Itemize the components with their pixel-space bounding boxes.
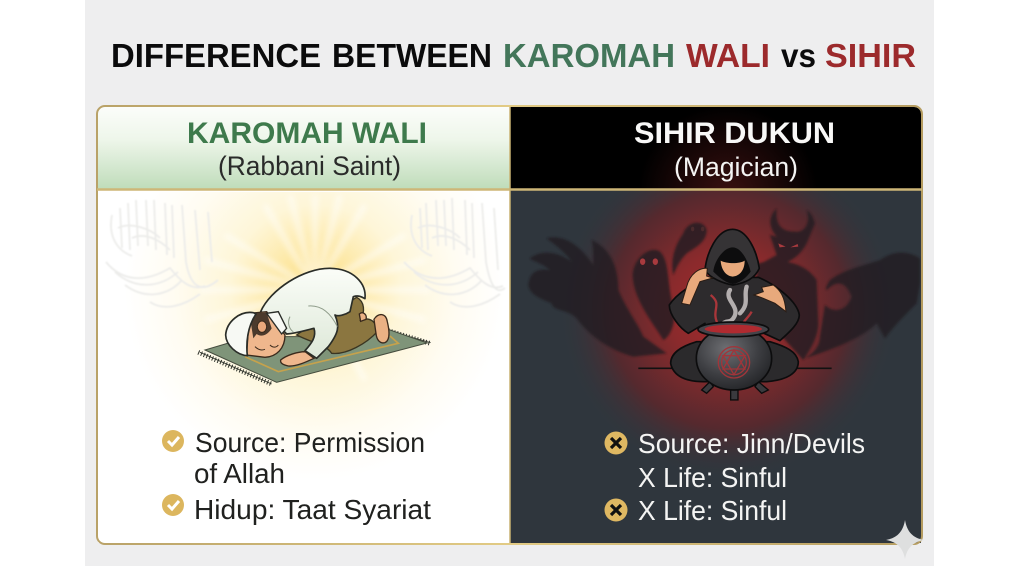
header: karomah wali: KAROMAH WALI [187, 117, 427, 150]
header: sihir dukun: SIHIR DUKUN [634, 117, 835, 150]
calligraphy watermark left [106, 200, 218, 307]
rune circle [718, 347, 750, 378]
trousers and feet [297, 297, 389, 353]
demon [758, 208, 815, 267]
cauldron feet [702, 382, 768, 400]
sihir bullet list: X Life: Sinful [638, 495, 787, 526]
shadow spirits [528, 208, 920, 360]
panel: karomah wali [98, 190, 510, 543]
face [721, 261, 745, 277]
right shadow hand [805, 253, 920, 358]
sihir bullet list: Source: Jinn/Devils [638, 428, 865, 459]
left shadow hand [528, 237, 667, 357]
title: vs [781, 37, 816, 74]
ground line [638, 366, 832, 371]
panel: sihir dukun [510, 190, 921, 543]
header: karomah wali: (Rabbani Saint) [218, 151, 401, 181]
icon: sparkle watermark [886, 520, 924, 559]
crossed legs [671, 342, 798, 382]
title: DIFFERENCE [111, 37, 321, 74]
title: BETWEEN [332, 37, 492, 74]
check icon 2 [162, 494, 184, 516]
shadow eyes [640, 227, 798, 265]
header: sihir dukun: (Magician) [674, 152, 798, 182]
karomah bullet list [162, 427, 431, 525]
title: WALI [686, 37, 770, 74]
head with prayer cap [226, 312, 287, 357]
sihir bullet list: X Life: Sinful [638, 462, 787, 493]
illustration: hooded magician with cauldron [638, 229, 832, 400]
karomah bullet list: of Allah [194, 458, 285, 489]
cauldron body [696, 327, 772, 390]
robe red swirls [711, 295, 752, 327]
light glow [120, 192, 510, 492]
title [111, 37, 916, 74]
calligraphy watermark right [404, 198, 505, 307]
small ghost [672, 223, 707, 275]
robe [669, 277, 799, 341]
x icon 1 [604, 432, 628, 454]
left panel background [98, 190, 510, 543]
arms and hands [682, 268, 786, 312]
check icon 1 [162, 430, 184, 452]
cauldron rim [698, 322, 769, 337]
title: SIHIR [825, 37, 916, 74]
karomah bullet list: Hidup: Taat Syariat [194, 494, 431, 525]
right panel background [510, 190, 921, 543]
prayer rug [198, 329, 431, 384]
hood [705, 229, 759, 285]
smoke [723, 287, 747, 323]
x icon 2 [604, 498, 628, 522]
header: karomah wali [98, 107, 510, 189]
left ghost [633, 250, 674, 340]
white robe [261, 268, 365, 358]
sihir bullet list [604, 428, 865, 526]
illustration: man in prostration on prayer rug [198, 268, 431, 384]
hand [281, 352, 314, 366]
karomah bullet list: Source: Permission [195, 427, 425, 458]
header: sihir dukun [510, 107, 921, 189]
red brew [705, 325, 762, 333]
robe folds [289, 306, 337, 332]
card gold frame [97, 106, 922, 544]
title: KAROMAH [503, 37, 675, 74]
